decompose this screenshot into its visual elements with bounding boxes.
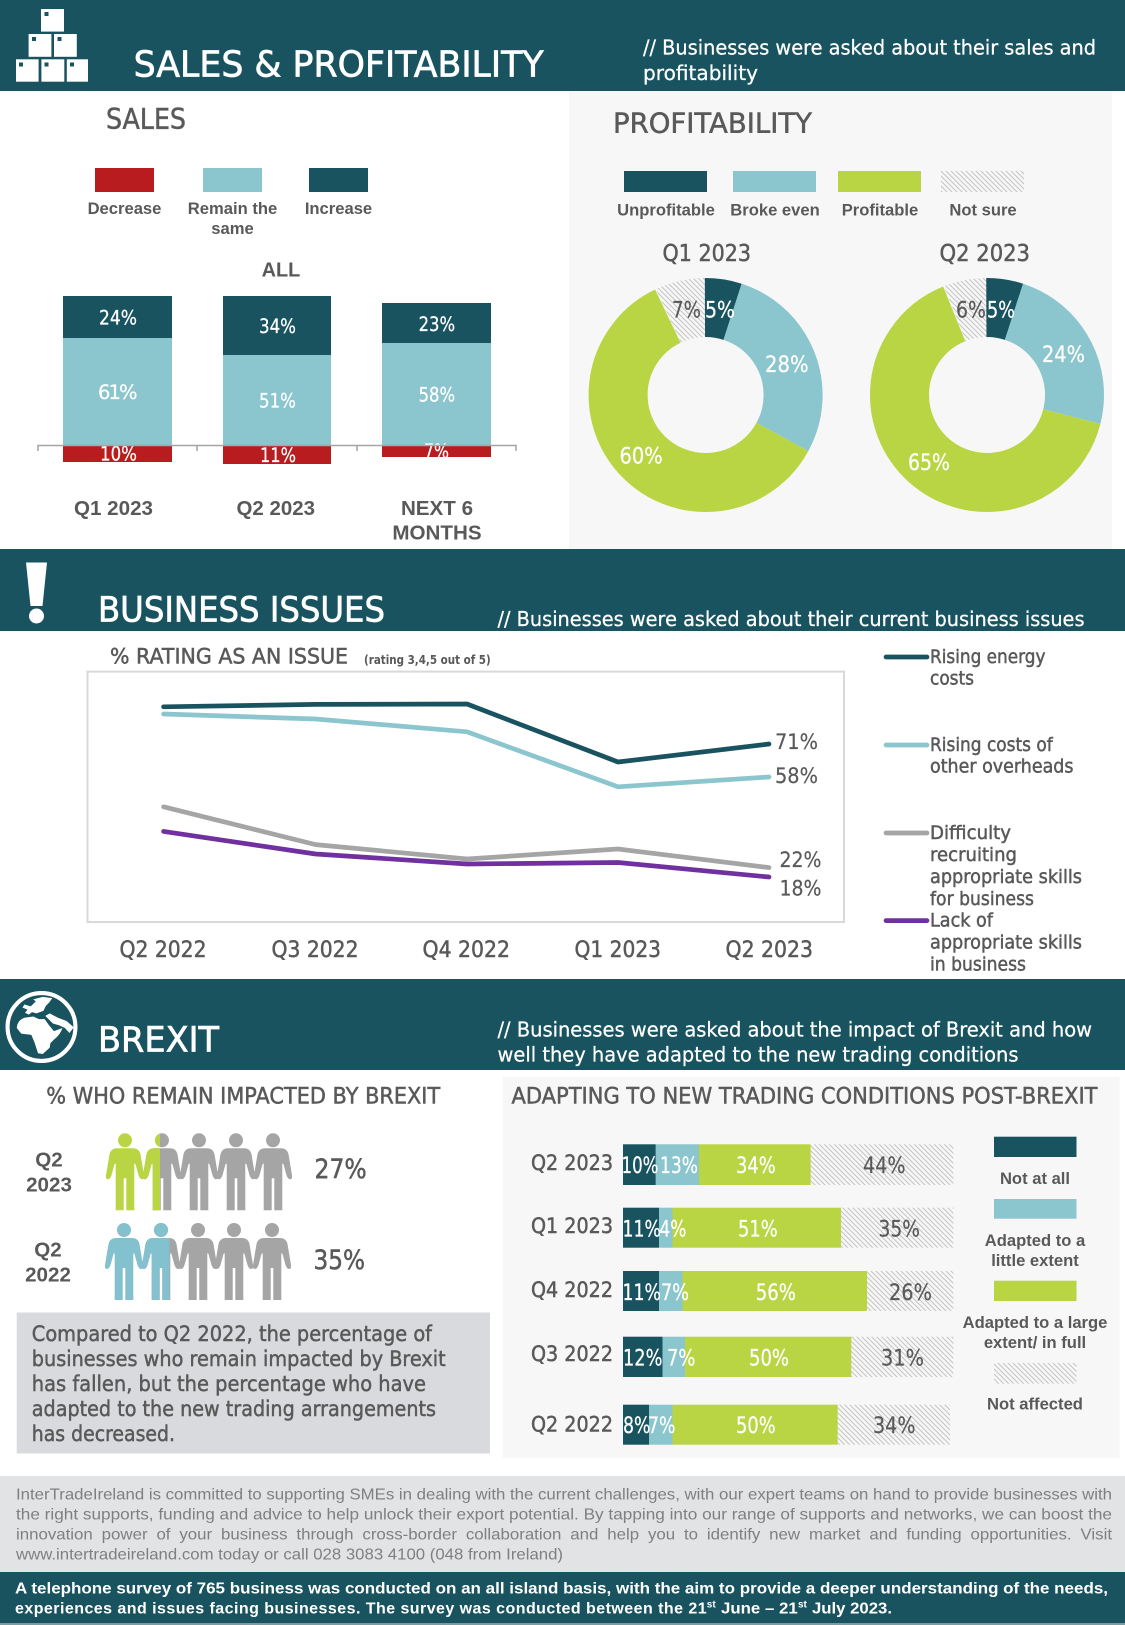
panel: intertradeireland statement [0, 1476, 1125, 1572]
row: Q2 2023: Q2 2023 [531, 1151, 613, 1175]
legend: adapting: Not at all [1000, 1169, 1070, 1188]
row: Q2 2022 [25, 1223, 365, 1300]
header: sales and profitability [0, 0, 1125, 91]
panel: survey note: st [798, 1600, 808, 1610]
legend: sales: same [211, 219, 254, 238]
legend: business issues: appropriate skills [930, 866, 1082, 888]
icon: stacked boxes [16, 9, 88, 82]
row: Q2 2023 [531, 1144, 953, 1185]
legend: adapting: extent/ in full [984, 1333, 1086, 1352]
callout: summary text: businesses who remain impacted by Brexit [32, 1347, 446, 1372]
donut chart: Q2 2023: 6% [956, 298, 986, 323]
row: Q3 2022: 12% [623, 1347, 662, 1372]
callout: summary text: adapted to the new trading arrangements [32, 1397, 436, 1422]
axis labels: MONTHS [392, 522, 482, 544]
legend: adapting: little extent [991, 1251, 1079, 1270]
legend: business issues: Lack of [930, 910, 994, 932]
line chart: Q3 2022 [272, 938, 358, 963]
icon: globe [8, 993, 75, 1061]
subtitle: // Businesses were asked about their sales and [643, 35, 1096, 59]
pictogram: people 27% [106, 1133, 292, 1210]
header: business issues [0, 549, 1125, 631]
row: Q1 2023: 35% [878, 1218, 920, 1243]
row: Q2 2023: 34% [736, 1154, 776, 1179]
chart heading: (rating 3,4,5 out of 5) [364, 653, 491, 667]
title: BUSINESS ISSUES [98, 591, 385, 631]
legend: business issues: other overheads [930, 756, 1074, 778]
heading: ADAPTING TO NEW TRADING CONDITIONS POST-BREXIT [512, 1084, 1098, 1109]
stacked bar chart: sales: 24% [99, 306, 137, 330]
donut chart: Q1 2023: 5% [705, 298, 735, 323]
panel: survey note: July 2023. [812, 1600, 892, 1618]
heading: sales: SALES [106, 103, 186, 136]
panel: profitability [569, 91, 1112, 549]
row: Q3 2022: Q3 2022 [531, 1342, 613, 1366]
legend: business issues: Rising energy [930, 646, 1046, 668]
panel: survey note [0, 1572, 1125, 1625]
line chart: 22% [780, 848, 822, 872]
donut chart: Q1 2023: 28% [765, 353, 809, 378]
row: Q4 2022 [531, 1271, 953, 1311]
panel: remain impacted by brexit [17, 1084, 490, 1454]
legend: adapting [963, 1137, 1107, 1414]
row: Q4 2022: 26% [889, 1281, 932, 1306]
callout: summary text: has fallen, but the percentage who have [32, 1372, 426, 1397]
row: Q3 2022: 7% [667, 1347, 696, 1372]
donut chart: Q2 2023: 5% [987, 298, 1015, 323]
row: Q2 2023: Q2 [35, 1149, 63, 1172]
chart heading: % RATING AS AN ISSUE [110, 644, 348, 668]
donut chart: Q2 2023 [900, 241, 1085, 482]
row: Q1 2023 [531, 1208, 953, 1248]
axis labels: NEXT 6 [401, 497, 473, 520]
panel: intertradeireland statement: InterTradeIreland is committed to supporting SMEs in dealing with the current challenges, with our expert teams on hand to provide businesses with [16, 1486, 1112, 1504]
donut chart: Q1 2023: 60% [620, 445, 663, 470]
row: Q2 2022: 2022 [25, 1264, 71, 1287]
legend: adapting: Adapted to a large [963, 1313, 1107, 1332]
legend: sales [88, 168, 372, 238]
donut chart: Q2 2023: Q2 2023 [940, 241, 1030, 267]
row: Q4 2022: Q4 2022 [531, 1278, 613, 1302]
callout: summary text: Compared to Q2 2022, the percentage of [32, 1322, 432, 1347]
row: Q1 2023: 4% [659, 1218, 686, 1243]
stacked bar chart: adapting [531, 1144, 953, 1445]
callout: summary text: has decreased. [32, 1422, 175, 1447]
line chart: Q1 2023 [574, 938, 661, 963]
axis labels: Q2 2023 [236, 497, 315, 520]
row: Q3 2022 [531, 1337, 953, 1377]
subtitle: // Businesses were asked about the impact of Brexit and how [498, 1018, 1092, 1042]
row: Q2 2022: 8% [623, 1414, 650, 1439]
row: Q2 2023: 27% [314, 1154, 367, 1185]
legend: business issues: Rising costs of [930, 734, 1054, 756]
legend: sales: Decrease [88, 199, 161, 218]
donut chart: Q1 2023: Q1 2023 [662, 241, 751, 267]
heading: profitability: PROFITABILITY [613, 107, 813, 140]
panel: intertradeireland statement: the right supports, funding and advice to help unlock their export potential. By tapping into our range of supports and networks, we can boost the [16, 1506, 1112, 1524]
stacked bar chart: sales: 51% [259, 390, 296, 413]
donut chart: Q1 2023 [618, 241, 809, 482]
title: BREXIT [98, 1021, 220, 1061]
row: Q2 2022: Q2 [34, 1239, 62, 1262]
line chart: Q2 2022 [120, 938, 206, 963]
row: Q1 2023: 11% [622, 1218, 661, 1243]
legend: profitability [617, 171, 1024, 220]
line chart: Q2 2023 [726, 938, 813, 963]
legend: profitability: Unprofitable [617, 200, 715, 220]
row: Q1 2023: Q1 2023 [531, 1214, 613, 1238]
legend: business issues: costs [930, 668, 974, 690]
row: Q2 2023 [26, 1133, 367, 1210]
stacked bar chart: sales: 7% [424, 440, 449, 463]
legend: adapting: Adapted to a [985, 1231, 1086, 1250]
stacked bar chart: sales: 61% [98, 381, 138, 404]
stacked bar chart: sales: 34% [259, 315, 296, 338]
panel: adapting to new trading conditions [503, 1077, 1120, 1458]
icon: exclamation mark [26, 562, 47, 624]
line chart: 71% [775, 730, 818, 754]
panel: survey note: June – 21 [721, 1600, 798, 1618]
legend: business issues: for business [930, 888, 1034, 910]
row: Q2 2023: 2023 [26, 1174, 72, 1197]
axis labels [74, 497, 482, 544]
panel: survey note: A telephone survey of 765 business was conducted on an all island basis, with the aim to provide a deeper understanding of the needs, [15, 1580, 1108, 1598]
legend: business issues: recruiting [930, 844, 1017, 866]
legend: profitability: Not sure [949, 200, 1017, 220]
line chart: 58% [775, 764, 818, 788]
row: Q4 2022: 56% [756, 1281, 796, 1306]
row: Q4 2022: 7% [661, 1281, 689, 1306]
row: Q3 2022: 50% [749, 1347, 789, 1372]
legend: business issues: appropriate skills [930, 932, 1082, 954]
legend: business issues [886, 646, 1082, 976]
chart heading [110, 644, 491, 668]
axis labels: Q1 2023 [74, 497, 153, 520]
row: Q2 2023: 10% [622, 1154, 658, 1179]
stacked bar chart: sales: 11% [260, 444, 296, 467]
subtitle [643, 35, 1096, 85]
header: brexit [0, 979, 1125, 1070]
line chart: 18% [780, 877, 822, 901]
row: Q2 2022: 7% [648, 1414, 676, 1439]
heading: % WHO REMAIN IMPACTED BY BREXIT [46, 1084, 441, 1109]
subtitle [498, 1018, 1092, 1066]
legend: sales: Increase [305, 199, 372, 218]
legend: sales: Remain the [188, 199, 277, 218]
panel: survey note: st [707, 1600, 716, 1610]
callout: summary text [17, 1312, 490, 1454]
row: Q4 2022: 11% [622, 1281, 661, 1306]
donut chart: Q2 2023: 65% [908, 451, 950, 476]
legend: business issues: in business [930, 954, 1026, 976]
panel: sales [38, 103, 516, 544]
panel: business issues chart [88, 644, 1082, 976]
row: Q2 2022: 34% [873, 1414, 916, 1439]
legend: business issues: Difficulty [930, 822, 1011, 844]
chart heading: all: ALL [262, 260, 300, 282]
subtitle: well they have adapted to the new trading conditions [498, 1042, 1018, 1066]
legend: profitability: Broke even [730, 200, 820, 220]
row: Q2 2023: 44% [863, 1154, 906, 1179]
donut chart: Q2 2023: 24% [1042, 343, 1085, 368]
panel: intertradeireland statement: innovation power of your business through cross-border collaboration and help you to identify new market and funding opportunities. Visit [16, 1526, 1113, 1544]
stacked bar chart: sales [38, 296, 516, 467]
line chart: Q4 2022 [422, 938, 510, 963]
panel: survey note: experiences and issues facing businesses. The survey was conducted between the 21 [15, 1600, 707, 1618]
stacked bar chart: sales: 23% [419, 313, 455, 336]
row: Q2 2022: Q2 2022 [531, 1413, 613, 1437]
stacked bar chart: sales: 58% [419, 384, 455, 407]
row: Q2 2022: 35% [314, 1245, 365, 1276]
line chart [88, 672, 844, 963]
subtitle: // Businesses were asked about their current business issues [498, 607, 1084, 631]
row: Q2 2022: 50% [736, 1414, 776, 1439]
legend: adapting: Not affected [987, 1394, 1083, 1414]
row: Q2 2022 [531, 1405, 950, 1445]
stacked bar chart: sales: 10% [100, 442, 137, 466]
pictogram: people 35% [105, 1223, 291, 1300]
donut chart: Q1 2023: 7% [672, 298, 701, 323]
legend: profitability: Profitable [842, 200, 918, 220]
subtitle: profitability [643, 61, 758, 85]
row: Q2 2023: 13% [660, 1154, 698, 1179]
row: Q3 2022: 31% [881, 1347, 924, 1372]
row: Q1 2023: 51% [738, 1218, 778, 1243]
panel: intertradeireland statement: www.intertradeireland.com today or call 028 3083 4100 (048 from Ireland) [15, 1546, 563, 1564]
title: SALES & PROFITABILITY [134, 44, 545, 86]
